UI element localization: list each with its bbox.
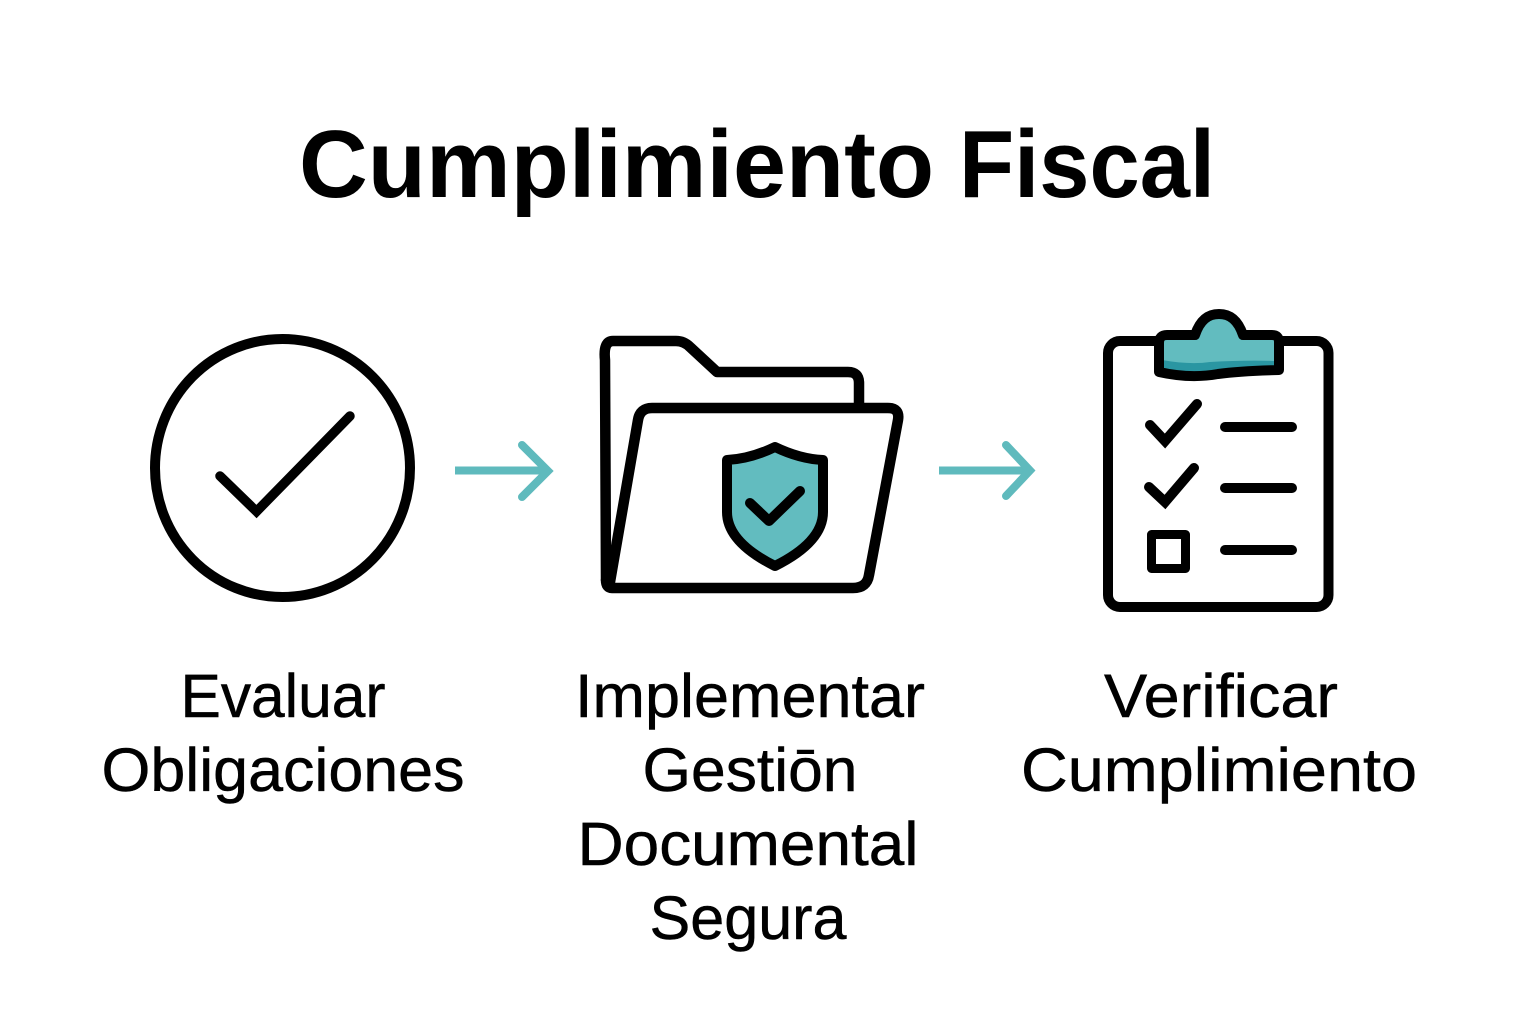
title xyxy=(299,111,1215,218)
arrow: step one to step two xyxy=(455,445,548,497)
label: evaluar obligaciones: Evaluar xyxy=(180,662,386,730)
checklist items xyxy=(1149,404,1292,568)
label: implementar gestion documental segura: Gestiōn xyxy=(642,736,858,804)
label: implementar gestion documental segura: Segura xyxy=(650,884,847,952)
label: verificar cumplimiento xyxy=(1021,662,1417,804)
label: verificar cumplimiento: Verificar xyxy=(1104,662,1338,730)
label: implementar gestion documental segura: Implementar xyxy=(575,662,925,730)
label: evaluar obligaciones xyxy=(102,662,464,804)
icon: folder with shield xyxy=(605,341,898,588)
label: implementar gestion documental segura: Documental xyxy=(578,810,918,878)
title: Fiscal xyxy=(959,111,1215,218)
icon: shield xyxy=(727,447,823,566)
label: implementar gestion documental segura xyxy=(575,662,925,952)
title: Cumplimiento xyxy=(299,111,934,218)
label: verificar cumplimiento: Cumplimiento xyxy=(1021,736,1417,804)
icon: clipboard checklist xyxy=(1108,314,1328,607)
label: evaluar obligaciones: Obligaciones xyxy=(102,736,464,804)
arrow: step two to step three xyxy=(939,445,1030,496)
icon: clipboard clip xyxy=(1159,314,1279,376)
icon: circle with check xyxy=(155,339,410,597)
